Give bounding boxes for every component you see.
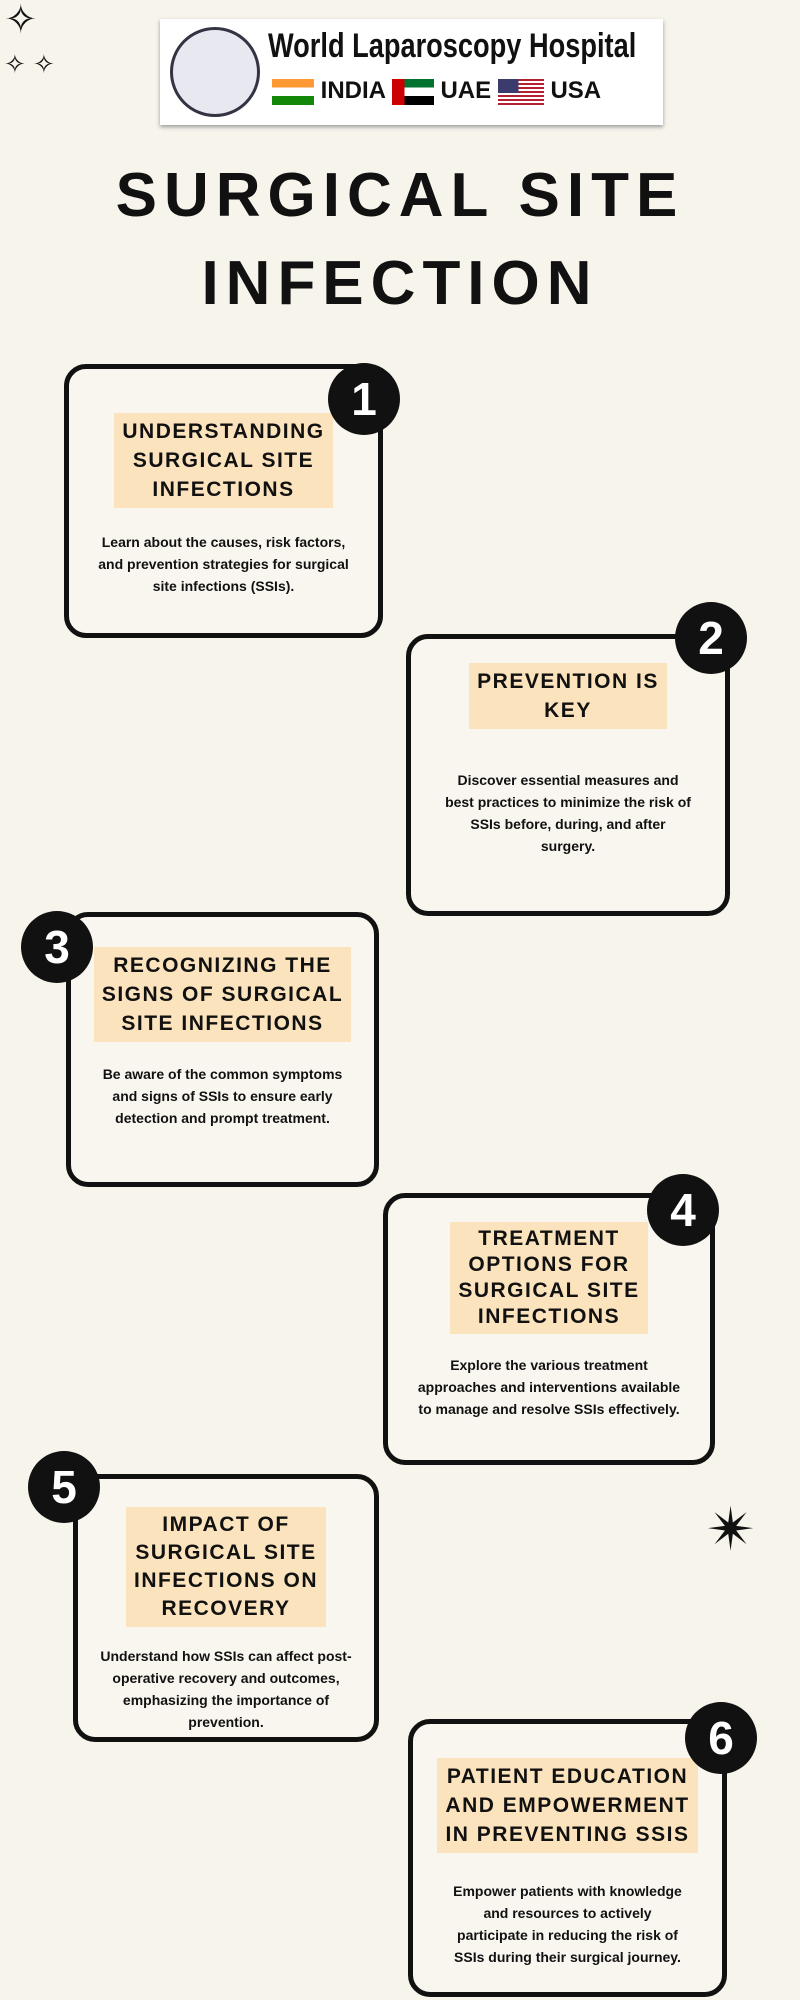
heading 1: UNDERSTANDING: [122, 420, 325, 443]
heading 4: OPTIONS FOR: [468, 1253, 630, 1276]
header logo: [160, 19, 663, 125]
heading 4: [450, 1222, 648, 1334]
decorative stars: [4, 0, 55, 79]
title: [116, 161, 684, 318]
heading 6: IN PREVENTING SSIS: [445, 1823, 690, 1846]
heading 3: SITE INFECTIONS: [121, 1012, 324, 1035]
decorative stars: ✧ ✧: [4, 49, 55, 79]
heading 3: RECOGNIZING THE: [113, 954, 332, 977]
heading 4: SURGICAL SITE: [458, 1279, 640, 1302]
heading 2: KEY: [544, 699, 592, 722]
badge 3: 3: [44, 921, 70, 973]
badge 6: 6: [708, 1712, 734, 1764]
badge 4: [647, 1174, 719, 1246]
heading 1: INFECTIONS: [152, 478, 295, 501]
body 6: Empower patients with knowledge and resources to actively participate in reducing the risk of SSIs during their surgical journey.: [453, 1883, 682, 1965]
card 1: [64, 364, 383, 638]
heading 5: IMPACT OF: [162, 1513, 290, 1536]
badge 1: 1: [351, 373, 377, 425]
badge 3: [21, 911, 93, 983]
card 3: [66, 912, 379, 1187]
body 1: Learn about the causes, risk factors, and prevention strategies for surgical site infections (SSIs).: [98, 534, 349, 594]
heading 2: [469, 663, 667, 729]
heading 4: INFECTIONS: [478, 1305, 620, 1328]
badge 5: 5: [51, 1461, 77, 1513]
country labels: INDIA UAE USA: [321, 77, 601, 104]
decorative burst: ✴: [706, 1496, 756, 1563]
card 5: [73, 1474, 379, 1742]
heading 3: SIGNS OF SURGICAL: [102, 983, 343, 1006]
title: INFECTION: [201, 249, 599, 318]
heading 6: PATIENT EDUCATION: [447, 1765, 688, 1788]
body 2: Discover essential measures and best practices to minimize the risk of SSIs before, during, and after surgery.: [445, 772, 691, 854]
card 2: [406, 634, 730, 916]
badge 2: 2: [698, 612, 724, 664]
heading 5: INFECTIONS ON: [134, 1569, 318, 1592]
body 3: Be aware of the common symptoms and signs of SSIs to ensure early detection and prompt treatment.: [103, 1066, 342, 1126]
heading 3: [94, 947, 351, 1042]
body 5: Understand how SSIs can affect post-operative recovery and outcomes, emphasizing the importance of prevention.: [100, 1648, 352, 1730]
badge 1: [328, 363, 400, 435]
badge 4: 4: [670, 1184, 696, 1236]
badge 5: [28, 1451, 100, 1523]
card 6: [408, 1719, 727, 1997]
heading 1: [114, 413, 333, 508]
hospital name: World Laparoscopy Hospital: [268, 27, 636, 65]
badge 6: [685, 1702, 757, 1774]
heading 5: SURGICAL SITE: [135, 1541, 317, 1564]
logo emblem: [170, 27, 260, 117]
card 4: [383, 1193, 715, 1465]
heading 5: [126, 1507, 326, 1627]
heading 6: AND EMPOWERMENT: [445, 1794, 690, 1817]
badge 2: [675, 602, 747, 674]
body 4: Explore the various treatment approaches and interventions available to manage and resolve SSIs effectively.: [418, 1357, 680, 1417]
heading 5: RECOVERY: [161, 1597, 291, 1620]
heading 4: TREATMENT: [478, 1227, 620, 1250]
heading 2: PREVENTION IS: [477, 670, 659, 693]
heading 1: SURGICAL SITE: [133, 449, 314, 472]
heading 6: [437, 1758, 698, 1853]
title: SURGICAL SITE: [116, 161, 684, 230]
